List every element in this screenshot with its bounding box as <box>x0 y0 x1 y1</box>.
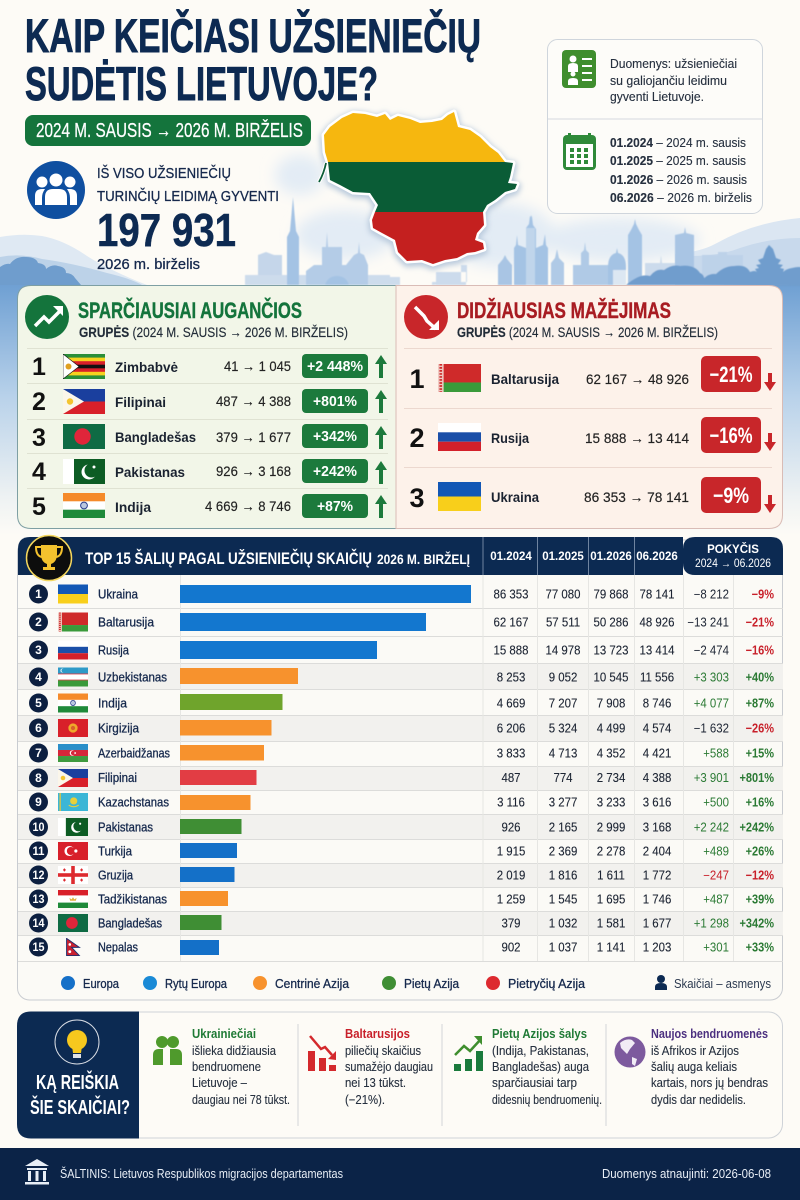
info card <box>548 40 763 214</box>
column: 01.2024: 86 353 <box>494 587 529 602</box>
column: 01.2026: 1 141 <box>597 940 626 955</box>
background: sky and skyline <box>0 155 800 535</box>
insight: Ukrainians: bendruomene <box>192 1060 261 1074</box>
column: absolute change: +489 <box>703 844 729 859</box>
title: SUDĖTIS LIETUVOJE? <box>25 57 378 110</box>
column: absolute change: −13 241 <box>687 615 729 630</box>
legend: Centrinė Azija <box>275 977 349 991</box>
date range pill <box>25 115 311 146</box>
column: 01.2024: 926 <box>501 820 521 835</box>
column: 01.2026: 79 868 <box>594 587 629 602</box>
icon: document <box>562 50 596 88</box>
column: absolute change: +487 <box>703 892 729 907</box>
rank circles: 6 <box>35 721 42 735</box>
insight: Belarusians: Baltarusijos <box>345 1027 410 1041</box>
column: 01.2024: 1 259 <box>497 892 526 907</box>
table header: POKYČIS <box>707 543 759 556</box>
rank circles: 13 <box>32 892 45 906</box>
icon: institution <box>25 1159 49 1184</box>
column: 01.2026: 4 499 <box>597 721 626 736</box>
insight: Ukrainians: daugiau nei 78 tūkst. <box>192 1093 290 1107</box>
column: 01.2025: 2 369 <box>549 844 578 859</box>
column: absolute change: +4 077 <box>694 696 729 711</box>
total residents block: 197 931 <box>97 204 236 256</box>
row: Ukraina <box>409 477 776 513</box>
country names: Kazachstanas <box>98 796 169 810</box>
column: 01.2024: 15 888 <box>494 643 529 658</box>
row: Filipinai: 2 <box>32 388 46 416</box>
country names: Indija <box>98 696 127 710</box>
title <box>25 9 481 110</box>
info card: 01.2026 – 2026 m. sausis <box>610 173 747 187</box>
footer: ŠALTINIS: Lietuvos Respublikos migracijos departamentas <box>60 1166 343 1181</box>
column: 01.2024: 62 167 <box>494 615 529 630</box>
insight: South Asia: didesnių bendruomenių. <box>492 1093 602 1107</box>
column: 06.2026: 78 141 <box>640 587 675 602</box>
column: 01.2025: 5 324 <box>549 721 578 736</box>
column: 01.2024: 8 253 <box>497 670 526 685</box>
column: percent change: +40% <box>746 671 775 685</box>
column: 06.2026: 4 421 <box>643 746 672 761</box>
column: 01.2026: 2 734 <box>597 771 626 785</box>
row: Indija: 4 669 → 8 746 <box>205 498 291 514</box>
column: absolute change: +301 <box>703 940 729 955</box>
column: 01.2025: 57 511 <box>546 615 580 630</box>
column: absolute change: −2 474 <box>694 643 729 658</box>
row: Rusija: −16% <box>710 423 752 448</box>
title: KAIP KEIČIASI UŽSIENIEČIŲ <box>25 9 481 62</box>
row: Filipinai: +801% <box>313 393 357 410</box>
column: 06.2026: 13 414 <box>640 643 675 658</box>
column: percent change: −9% <box>752 588 774 602</box>
column: 01.2025: 774 <box>553 771 573 785</box>
column: 06.2026: 48 926 <box>640 615 675 630</box>
column: 01.2025: 9 052 <box>549 670 578 685</box>
rank circles: 15 <box>32 940 45 954</box>
table header: 01.2024 <box>490 551 532 563</box>
country names: Tadžikistanas <box>98 892 167 906</box>
info card: su galiojančiu leidimu <box>610 74 727 88</box>
column: absolute change: +3 901 <box>694 771 729 785</box>
row: Indija: Indija <box>115 499 151 515</box>
column: 06.2026: 1 772 <box>643 868 672 883</box>
info card: Duomenys: užsieniečiai <box>610 57 737 71</box>
column: percent change: +26% <box>746 845 775 859</box>
total residents block: IŠ VISO UŽSIENIEČIŲ <box>97 165 231 182</box>
column: percent change: −12% <box>746 869 775 883</box>
country names: Kirgizija <box>98 722 139 736</box>
table: top 15 countries <box>18 536 783 1000</box>
column: 01.2026: 10 545 <box>594 670 629 685</box>
row: Zimbabvė: 1 <box>32 353 46 381</box>
insight: Ukrainians <box>153 1027 290 1107</box>
row: Ukraina: 86 353 → 78 141 <box>584 489 689 505</box>
column: 01.2024: 902 <box>501 940 521 955</box>
column: percent change: +39% <box>746 893 775 907</box>
table header <box>18 537 783 575</box>
column: percent change: +242% <box>739 821 774 835</box>
insight: South Asia: (Indija, Pakistanas, <box>492 1044 589 1058</box>
country names: Baltarusija <box>98 616 154 630</box>
country names: Uzbekistanas <box>98 670 167 684</box>
column: absolute change: +2 242 <box>694 820 729 835</box>
column: 06.2026: 4 574 <box>643 721 672 736</box>
country names: Gruzija <box>98 868 133 882</box>
rank circles: 8 <box>35 771 42 785</box>
icon: calendar <box>563 133 596 170</box>
row: Pakistanas: 926 → 3 168 <box>216 463 291 479</box>
column: percent change: +342% <box>739 917 774 931</box>
insight: South Asia: Bangladešas) auga <box>492 1060 589 1074</box>
column: 01.2025: 1 032 <box>549 916 578 931</box>
column: 01.2024: 2 019 <box>497 868 526 883</box>
insight: South Asia <box>454 1027 602 1107</box>
column: absolute change: +1 298 <box>694 916 729 931</box>
row: Rusija: Rusija <box>491 430 529 446</box>
column: absolute change: −8 212 <box>694 587 729 602</box>
column: 01.2025 <box>546 587 581 955</box>
date range pill: 2024 M. SAUSIS → 2026 M. BIRŽELIS <box>36 119 303 142</box>
rank circles: 9 <box>35 795 42 809</box>
column: percent change: +16% <box>746 796 775 810</box>
insight: new communities: kartais, nors jų bendras <box>651 1076 768 1090</box>
row: Bangladešas: Bangladešas <box>115 429 196 445</box>
row: Zimbabvė: +2 448% <box>307 358 363 375</box>
row: Indija <box>32 493 387 521</box>
table header: 01.2026 <box>590 551 632 563</box>
insight: Ukrainians: išlieka didžiausia <box>192 1044 276 1058</box>
column: 01.2024: 4 669 <box>497 696 526 711</box>
column: percent change: −16% <box>746 644 775 658</box>
rank circles: 5 <box>35 696 42 710</box>
column: 06.2026 <box>640 587 675 955</box>
row: Baltarusija: 62 167 → 48 926 <box>586 371 689 387</box>
row: Ukraina: 3 <box>409 483 425 513</box>
column: 01.2025: 2 165 <box>549 820 578 835</box>
column: 06.2026: 8 746 <box>643 696 672 711</box>
panel: largest decrease: GRUPĖS (2024 M. SAUSIS → 2026 M. BIRŽELIS) <box>457 324 718 340</box>
right skyline <box>432 215 800 286</box>
row: Indija: 5 <box>32 493 46 521</box>
column: percent change: −21% <box>746 616 775 630</box>
column: 01.2026: 1 695 <box>597 892 626 907</box>
row: Indija: +87% <box>317 498 353 515</box>
icon: people <box>27 161 85 219</box>
country names: Ukraina <box>98 588 138 602</box>
column: 01.2025: 14 978 <box>546 643 581 658</box>
row: Rusija <box>409 417 776 453</box>
legend: Europa <box>83 977 119 991</box>
icon: growth arrow <box>25 295 69 339</box>
insight: Ukrainians: Ukrainiečiai <box>192 1027 256 1041</box>
rank circles: 7 <box>35 746 42 760</box>
column: absolute change: +3 303 <box>694 670 729 685</box>
insight: Belarusians: piliečių skaičius <box>345 1044 421 1058</box>
column: 01.2025: 3 277 <box>549 795 578 810</box>
flags <box>58 584 88 956</box>
row: Zimbabvė: 41 → 1 045 <box>224 358 291 374</box>
row: Bangladešas: 3 <box>32 424 46 452</box>
column: 06.2026: 4 388 <box>643 771 672 785</box>
row: Baltarusija: Baltarusija <box>491 371 559 387</box>
rank circles: 2 <box>35 615 42 629</box>
column: 01.2026: 50 286 <box>594 615 629 630</box>
legend: Rytų Europa <box>165 977 227 991</box>
column: 06.2026: 1 203 <box>643 940 672 955</box>
rank circles: 10 <box>32 820 45 834</box>
panel: fastest growing <box>18 286 396 528</box>
column: 01.2026 <box>594 587 629 955</box>
country names: Filipinai <box>98 771 137 785</box>
insight: Belarusians: (−21%). <box>345 1093 385 1107</box>
column: absolute change: +588 <box>703 746 729 761</box>
map: Lithuania flag <box>315 105 525 272</box>
insight: Belarusians: nei 13 tūkst. <box>345 1076 406 1090</box>
insight: new communities: iš Afrikos ir Azijos <box>651 1044 739 1058</box>
row: Ukraina: −9% <box>713 483 749 508</box>
row: Baltarusija <box>409 356 776 394</box>
column: 01.2026: 13 723 <box>594 643 629 658</box>
column: 06.2026: 3 168 <box>643 820 672 835</box>
row: Bangladešas: 379 → 1 677 <box>216 429 291 445</box>
info card: gyventi Lietuvoje. <box>610 90 704 104</box>
country names: Turkija <box>98 844 132 858</box>
column: absolute change: +500 <box>703 795 729 810</box>
table header: 06.2026 <box>636 551 678 563</box>
rank circles <box>29 584 48 956</box>
footer: Duomenys atnaujinti: 2026-06-08 <box>602 1167 771 1181</box>
column: percent change <box>739 588 775 955</box>
column: 01.2025: 77 080 <box>546 587 581 602</box>
total residents block <box>27 161 279 273</box>
column: 01.2025: 7 207 <box>549 696 578 711</box>
clouds <box>275 155 700 267</box>
column: 06.2026: 3 616 <box>643 795 672 810</box>
column: 01.2024: 379 <box>501 916 521 931</box>
row: Zimbabvė <box>32 353 387 381</box>
column: 06.2026: 1 677 <box>643 916 672 931</box>
rank circles: 1 <box>35 587 42 601</box>
insight: Ukrainians: Lietuvoje – <box>192 1076 247 1090</box>
panel: largest decrease: DIDŽIAUSIAS MAŽĖJIMAS <box>457 298 671 323</box>
column: 01.2026: 4 352 <box>597 746 626 761</box>
icon: trophy <box>26 536 72 580</box>
column: 01.2026: 1 611 <box>597 868 625 883</box>
country names <box>98 588 170 954</box>
row: Rusija: 2 <box>409 423 425 453</box>
rank circles: 4 <box>35 670 42 684</box>
insight: new communities: Naujos bendruomenės <box>651 1027 768 1041</box>
column: 01.2025: 4 713 <box>549 746 578 761</box>
total residents block: 2026 m. birželis <box>97 256 200 273</box>
legend: Pietryčių Azija <box>508 977 585 991</box>
row: Rusija: 15 888 → 13 414 <box>585 430 689 446</box>
row: Ukraina: Ukraina <box>491 489 539 505</box>
row: Filipinai: Filipinai <box>115 394 166 410</box>
table header: 2026 M. BIRŽELĮ <box>377 552 470 567</box>
left skyline <box>245 197 400 285</box>
column: 01.2024: 3 116 <box>497 795 525 810</box>
info card: 01.2024 – 2024 m. sausis <box>610 136 746 150</box>
country names: Rusija <box>98 644 129 658</box>
column: percent change: +15% <box>746 747 775 761</box>
column: 01.2024: 1 915 <box>497 844 526 859</box>
row: Filipinai <box>32 388 387 416</box>
row: Pakistanas: +242% <box>313 463 357 480</box>
left trees <box>0 257 81 285</box>
rank circles: 3 <box>35 643 42 657</box>
legend: Pietų Azija <box>404 977 459 991</box>
column: 01.2024: 3 833 <box>497 746 526 761</box>
insight: South Asia: sparčiausiai tarp <box>492 1076 577 1090</box>
column: 01.2026: 2 999 <box>597 820 626 835</box>
table header: 2024 → 06.2026 <box>695 558 771 570</box>
column: 01.2026: 3 233 <box>597 795 626 810</box>
column: 01.2025: 1 816 <box>549 868 578 883</box>
total residents block: TURINČIŲ LEIDIMĄ GYVENTI <box>97 188 279 205</box>
column: 01.2024 <box>494 587 529 955</box>
column: 06.2026: 2 404 <box>643 844 672 859</box>
row: Bangladešas <box>32 424 387 452</box>
column: 01.2025: 1 037 <box>549 940 578 955</box>
panel: what the numbers mean: KĄ REIŠKIA <box>36 1070 119 1094</box>
country names: Pakistanas <box>98 820 153 834</box>
panel: fastest growing: SPARČIAUSIAI AUGANČIOS <box>78 298 302 323</box>
icon: light bulb <box>55 1020 99 1064</box>
panel: largest decrease <box>396 286 782 528</box>
country names: Azerbaidžanas <box>98 746 170 760</box>
row: Pakistanas <box>32 458 387 486</box>
column: 01.2026: 7 908 <box>597 696 626 711</box>
panel: what the numbers mean: ŠIE SKAIČIAI? <box>30 1095 130 1119</box>
bars <box>180 585 471 955</box>
row: Zimbabvė: Zimbabvė <box>115 359 178 375</box>
column: percent change: +801% <box>739 771 774 785</box>
column: absolute change <box>687 587 729 955</box>
column: absolute change: −1 632 <box>694 721 729 736</box>
column: 06.2026: 1 746 <box>643 892 672 907</box>
column: 01.2025: 1 545 <box>549 892 578 907</box>
table header: TOP 15 ŠALIŲ PAGAL UŽSIENIEČIŲ SKAIČIŲ <box>85 549 372 568</box>
panel: fastest growing: GRUPĖS (2024 M. SAUSIS → 2026 M. BIRŽELIS) <box>79 324 348 340</box>
row: Bangladešas: +342% <box>313 428 357 445</box>
info card: 01.2025 – 2025 m. sausis <box>610 154 746 168</box>
footer <box>0 1148 800 1200</box>
column: absolute change: −247 <box>703 868 729 883</box>
column: percent change: +87% <box>746 697 775 711</box>
row: Baltarusija: −21% <box>710 362 752 387</box>
row: Filipinai: 487 → 4 388 <box>216 393 291 409</box>
rank circles: 14 <box>32 916 45 930</box>
insight: Belarusians: sumažėjo daugiau <box>345 1060 433 1074</box>
country names: Bangladešas <box>98 916 162 930</box>
row: Baltarusija: 1 <box>409 364 425 394</box>
insight: South Asia: Pietų Azijos šalys <box>492 1027 587 1041</box>
info card: 06.2026 – 2026 m. birželis <box>610 191 752 205</box>
column: 01.2026: 2 278 <box>597 844 626 859</box>
rank circles: 12 <box>32 868 45 882</box>
column: 01.2024: 6 206 <box>497 721 526 736</box>
insight: new communities <box>614 1027 768 1107</box>
panel: what the numbers mean <box>17 1012 782 1138</box>
column: 01.2024: 487 <box>501 771 521 785</box>
column: percent change: +33% <box>746 941 775 955</box>
insight: new communities: dydis dar nedidelis. <box>651 1093 746 1107</box>
rank circles: 11 <box>32 844 45 858</box>
insight: new communities: šalių auga keliais <box>651 1060 737 1074</box>
country names: Nepalas <box>98 940 138 954</box>
icon: decline arrow <box>404 295 448 339</box>
legend <box>61 975 771 991</box>
column: 01.2026: 1 581 <box>597 916 626 931</box>
column: percent change: −26% <box>746 722 775 736</box>
legend: Skaičiai – asmenys <box>674 977 771 991</box>
row: Pakistanas: 4 <box>32 458 46 486</box>
insight: Belarusians <box>308 1027 433 1107</box>
row: Pakistanas: Pakistanas <box>115 464 185 480</box>
table header: 01.2025 <box>542 551 584 563</box>
column: 06.2026: 11 556 <box>640 670 674 685</box>
